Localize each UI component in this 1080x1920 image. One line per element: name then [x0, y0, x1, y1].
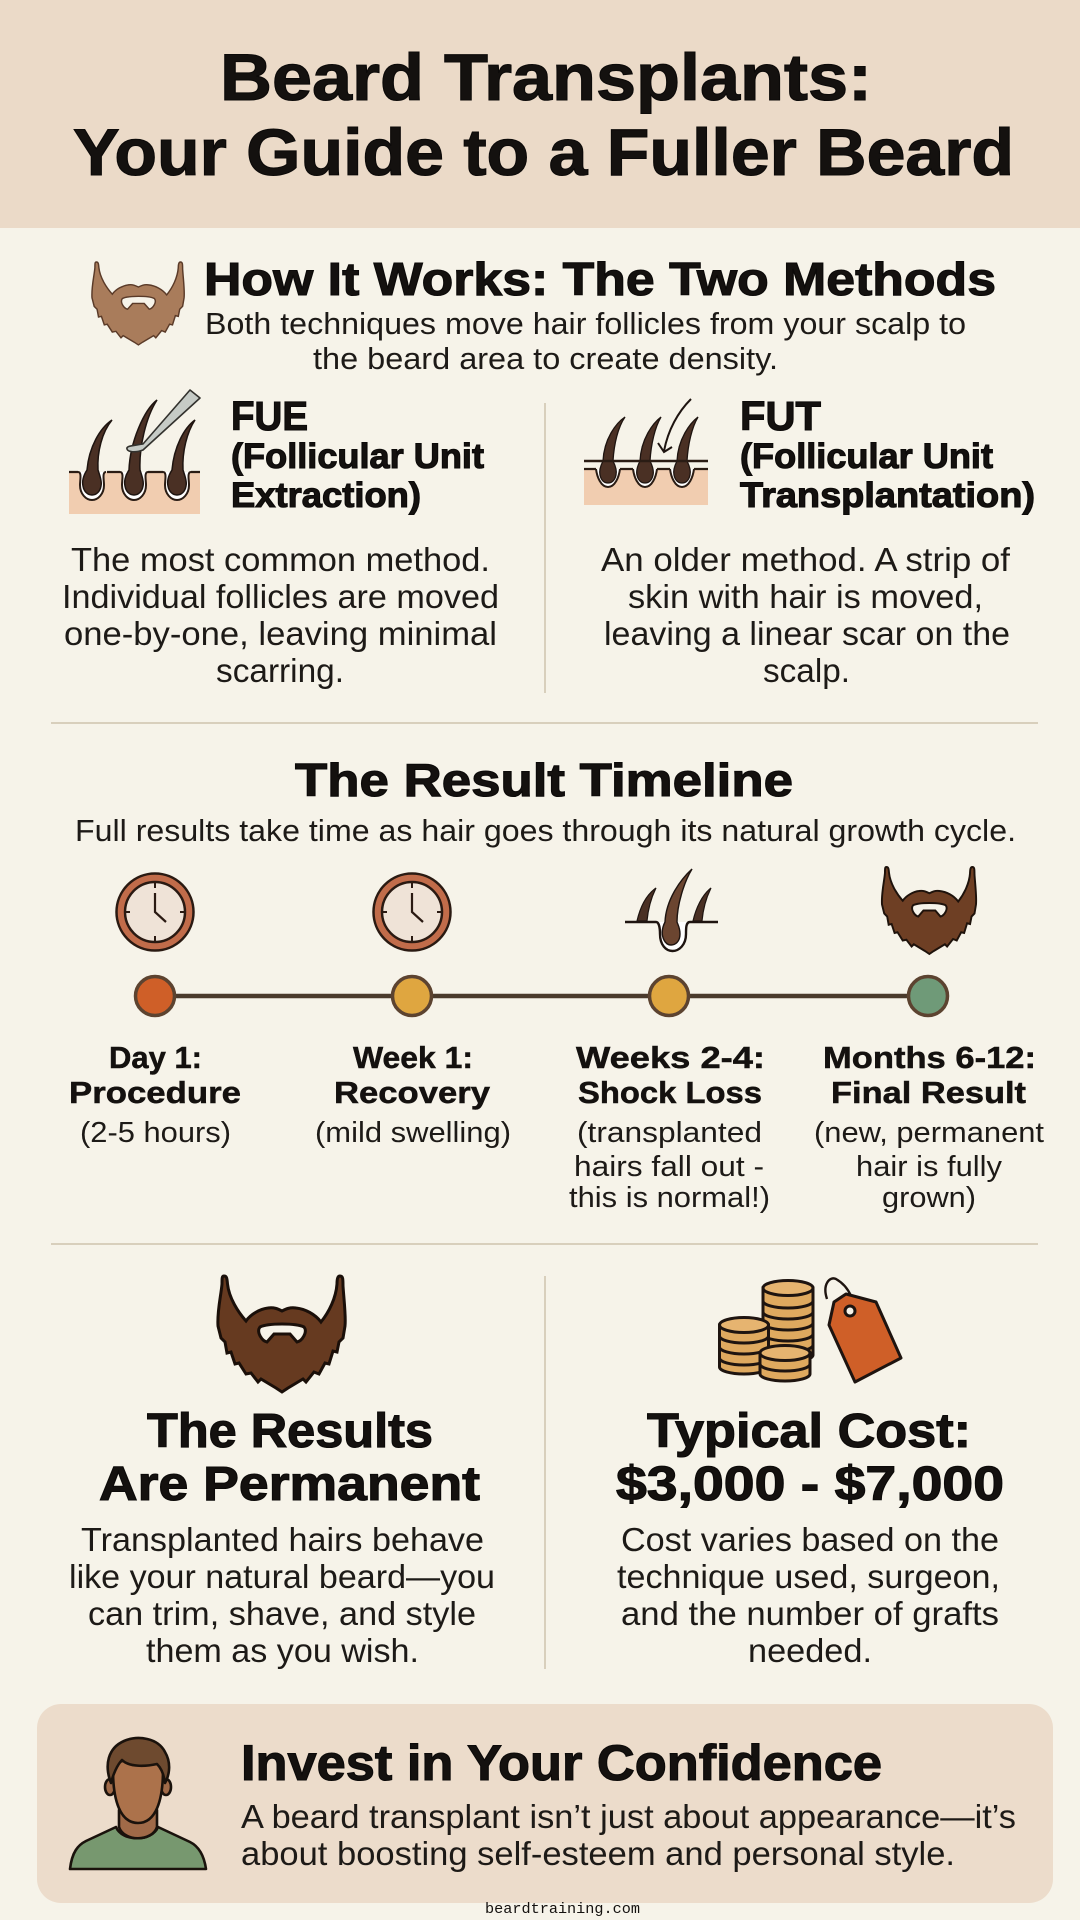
- text: FUT description: An older method. A strip of: [601, 541, 1011, 578]
- intro text: [205, 306, 966, 376]
- timeline intro text: Full results take time as hair goes through its natural growth cycle.: [75, 813, 1016, 848]
- icon: clock week 1: [374, 874, 450, 950]
- label: day 1: (2-5 hours): [80, 1117, 231, 1149]
- heading: FUT: Transplantation): [740, 476, 1035, 515]
- marker: week 1: [392, 976, 432, 1016]
- heading: FUT: FUT: [740, 393, 821, 439]
- text: invest description: about boosting self-esteem and personal style.: [241, 1835, 955, 1872]
- text: FUT description: leaving a linear scar on the: [604, 615, 1010, 652]
- header banner: [0, 0, 1080, 228]
- heading: FUE: Extraction): [231, 476, 421, 515]
- divider between methods: [544, 403, 546, 693]
- label: weeks 2-4: Weeks 2-4:: [576, 1040, 765, 1075]
- heading: FUT: [740, 393, 1035, 515]
- icon: FUT strip follicles: [584, 399, 708, 505]
- title: [73, 40, 1014, 189]
- panel: result timeline: [69, 754, 1044, 1214]
- heading: FUE: (Follicular Unit: [231, 437, 484, 476]
- timeline track: [155, 994, 928, 998]
- icon: FUE follicle extraction: [69, 390, 200, 514]
- text: FUT description: scalp.: [763, 652, 850, 689]
- text: cost description: [617, 1521, 1000, 1669]
- heading: typical cost: [616, 1405, 1004, 1511]
- text: permanent description: like your natural beard—you: [69, 1558, 495, 1595]
- icon: hair follicle: [625, 869, 718, 951]
- text: FUE description: one-by-one, leaving minimal: [64, 615, 497, 652]
- title: Beard Transplants:: [220, 40, 872, 114]
- text: FUE description: Individual follicles are moved: [62, 578, 499, 615]
- heading: how it works: How It Works: The Two Methods: [204, 253, 996, 305]
- heading: typical cost: $3,000 - $7,000: [616, 1458, 1004, 1511]
- text: invest description: [241, 1798, 1016, 1872]
- heading: FUE: [231, 393, 484, 515]
- heading: results permanent: Are Permanent: [99, 1458, 480, 1511]
- text: permanent description: Transplanted hairs behave: [81, 1521, 484, 1558]
- label: week 1: [315, 1040, 511, 1149]
- text: invest description: A beard transplant isn’t just about appearance—it’s: [241, 1798, 1016, 1835]
- text: FUE description: The most common method.: [71, 541, 490, 578]
- text: permanent description: [69, 1521, 495, 1669]
- panel: FUT: [584, 393, 1035, 689]
- marker: months 6-12: [908, 976, 948, 1016]
- text: cost description: Cost varies based on the: [621, 1521, 999, 1558]
- label: day 1: Day 1:: [109, 1040, 202, 1075]
- panel: how it works: [92, 253, 996, 376]
- panel: typical cost: [616, 1278, 1004, 1669]
- text: FUT description: skin with hair is moved,: [628, 578, 983, 615]
- label: months 6-12: (new, permanent: [814, 1117, 1044, 1149]
- panel: permanent results: [69, 1276, 495, 1669]
- label: months 6-12: Months 6-12:: [823, 1040, 1036, 1075]
- icon: clock day 1: [116, 874, 194, 950]
- marker: day 1: [136, 976, 174, 1016]
- label: months 6-12: [814, 1040, 1044, 1214]
- text: FUE description: [62, 541, 499, 689]
- title: Your Guide to a Fuller Beard: [73, 115, 1014, 189]
- label: months 6-12: grown): [882, 1182, 976, 1214]
- intro text: the beard area to create density.: [313, 341, 778, 376]
- marker: weeks 2-4: [650, 976, 688, 1016]
- footer url: beardtraining.com: [485, 1901, 640, 1918]
- label: week 1: (mild swelling): [315, 1117, 511, 1149]
- label: weeks 2-4: (transplanted: [577, 1117, 762, 1149]
- text: permanent description: them as you wish.: [146, 1632, 419, 1669]
- text: cost description: needed.: [748, 1632, 872, 1669]
- heading: typical cost: Typical Cost:: [647, 1405, 971, 1458]
- heading: results permanent: [99, 1405, 480, 1511]
- text: FUT description: [601, 541, 1011, 689]
- heading: result timeline: The Result Timeline: [295, 754, 793, 806]
- label: weeks 2-4: Shock Loss: [578, 1075, 762, 1110]
- label: week 1: Recovery: [334, 1075, 491, 1110]
- icon: person: [70, 1738, 206, 1869]
- label: day 1: Procedure: [69, 1075, 241, 1110]
- label: weeks 2-4: this is normal!): [569, 1182, 770, 1214]
- text: FUE description: scarring.: [216, 652, 344, 689]
- text: permanent description: can trim, shave, and style: [88, 1595, 476, 1632]
- heading: results permanent: The Results: [147, 1405, 433, 1458]
- panel: FUE: [62, 390, 499, 689]
- heading: invest: Invest in Your Confidence: [241, 1735, 882, 1791]
- intro text: Both techniques move hair follicles from your scalp to: [205, 306, 966, 341]
- label: week 1: Week 1:: [353, 1040, 473, 1075]
- icon: full beard: [882, 867, 976, 954]
- label: weeks 2-4: [569, 1040, 770, 1214]
- label: weeks 2-4: hairs fall out -: [574, 1151, 764, 1183]
- label: months 6-12: hair is fully: [856, 1151, 1003, 1183]
- heading: FUT: (Follicular Unit: [740, 437, 993, 476]
- icon: small beard: [92, 262, 184, 345]
- label: months 6-12: Final Result: [831, 1075, 1026, 1110]
- panel: invest in your confidence: [37, 1704, 1053, 1903]
- icon: large beard: [218, 1276, 345, 1392]
- text: cost description: technique used, surgeon,: [617, 1558, 1000, 1595]
- heading: FUE: FUE: [231, 393, 308, 439]
- icon: coins and price tag: [720, 1278, 901, 1382]
- label: day 1: [69, 1040, 241, 1149]
- text: cost description: and the number of grafts: [621, 1595, 999, 1632]
